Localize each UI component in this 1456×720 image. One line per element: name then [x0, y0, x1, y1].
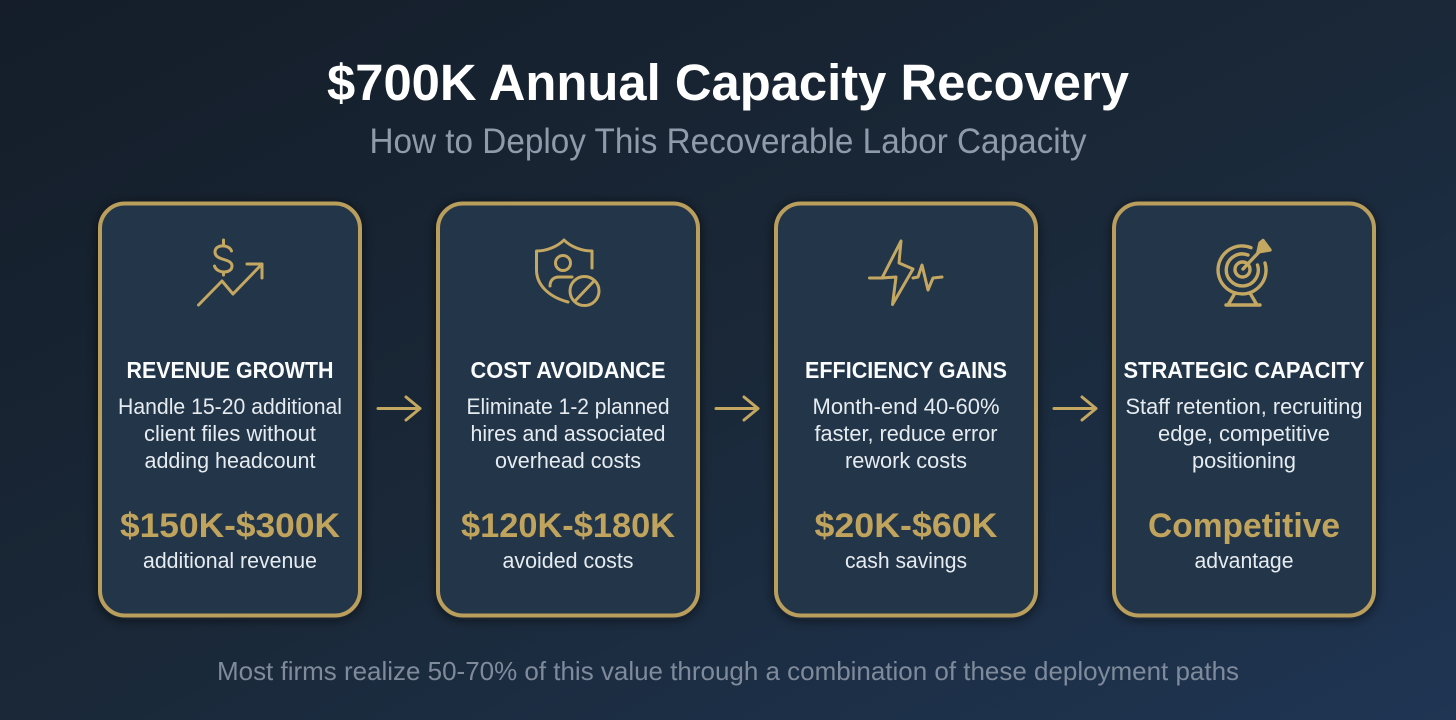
value caption: additional revenue [143, 548, 317, 573]
description: positioning [1192, 448, 1296, 473]
panel: efficiency gains [776, 204, 1036, 616]
description: adding headcount [144, 448, 316, 473]
description: faster, reduce error [814, 421, 998, 446]
panel: revenue growth [100, 204, 360, 616]
description: overhead costs [495, 448, 641, 473]
title: $700K Annual Capacity Recovery [327, 54, 1130, 111]
description: Eliminate 1-2 planned [466, 394, 670, 419]
panel: strategic capacity [1114, 204, 1374, 616]
description: Handle 15-20 additional [118, 394, 342, 419]
icon: lightning bolt with pulse [870, 241, 942, 304]
subtitle: How to Deploy This Recoverable Labor Capacity [370, 122, 1087, 161]
description: edge, competitive [1158, 421, 1330, 446]
description: hires and associated [470, 421, 666, 446]
value: $120K-$180K [461, 507, 675, 545]
arrow 2 [716, 397, 758, 420]
heading: EFFICIENCY GAINS [805, 357, 1007, 383]
value caption: advantage [1194, 548, 1294, 573]
heading: STRATEGIC CAPACITY [1124, 357, 1364, 383]
icon: shield with person and prohibition sign [536, 240, 599, 306]
arrow 3 [1054, 397, 1096, 420]
description: client files without [144, 421, 317, 446]
value caption: avoided costs [502, 548, 634, 573]
heading: COST AVOIDANCE [470, 357, 666, 383]
description: Month-end 40-60% [812, 394, 1000, 419]
heading: REVENUE GROWTH [126, 357, 334, 383]
value: $150K-$300K [120, 507, 340, 545]
value caption: cash savings [845, 548, 967, 573]
arrow 1 [378, 397, 420, 420]
icon: dollar sign with rising arrow [198, 240, 262, 305]
value: $20K-$60K [814, 507, 998, 545]
footer note: Most firms realize 50-70% of this value through a combination of these deployment paths [217, 656, 1239, 686]
icon: target with arrow [1218, 240, 1270, 305]
value: Competitive [1148, 507, 1340, 545]
panel: cost avoidance [438, 204, 698, 616]
description: rework costs [845, 448, 967, 473]
description: Staff retention, recruiting [1126, 394, 1362, 419]
